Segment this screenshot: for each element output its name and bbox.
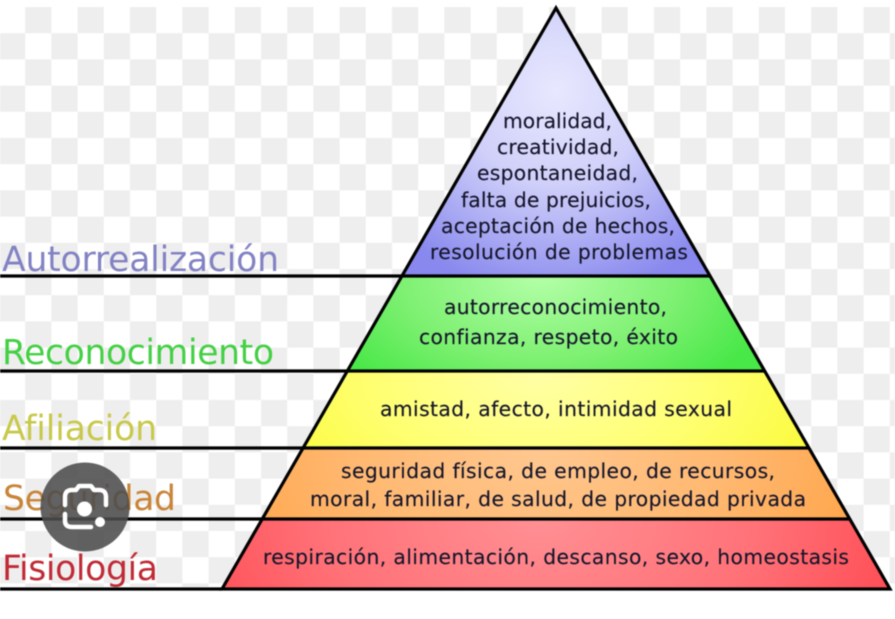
- tier: physiological: [222, 519, 890, 589]
- tier: self-actualization: espontaneidad,: [477, 161, 638, 185]
- tier: self-actualization: resolución de problemas: [430, 240, 688, 264]
- tier: esteem: confianza, respeto, éxito: [419, 325, 678, 349]
- tier: physiological: respiración, alimentación, descanso, sexo, homeostasis: [263, 545, 849, 569]
- tier: self-actualization: aceptación de hechos,: [441, 214, 675, 238]
- tier: belonging: [304, 371, 809, 448]
- tier: esteem: [349, 276, 764, 371]
- tier: self-actualization: creatividad,: [497, 135, 619, 159]
- tier: self-actualization: moralidad,: [503, 109, 612, 133]
- tier: esteem: autorreconocimiento,: [444, 295, 667, 319]
- tier: self-actualization: falta de prejuicios,: [461, 188, 651, 212]
- level label: Afiliación: Afiliación: [2, 409, 157, 449]
- tier: safety: seguridad física, de empleo, de recursos,: [341, 459, 775, 483]
- level label: Seguridad: Seguridad: [3, 479, 176, 519]
- level label: Reconocimiento: Reconocimiento: [2, 333, 274, 373]
- tier: self-actualization: [403, 8, 709, 276]
- level label: Autorrealización: Autorrealización: [2, 240, 279, 280]
- tier: safety: [263, 448, 850, 519]
- level label: Fisiología: Fisiología: [2, 549, 158, 589]
- icon: camera lens search badge: [40, 462, 130, 552]
- tier: safety: moral, familiar, de salud, de propiedad privada: [310, 487, 806, 511]
- tier: belonging: amistad, afecto, intimidad sexual: [380, 397, 732, 421]
